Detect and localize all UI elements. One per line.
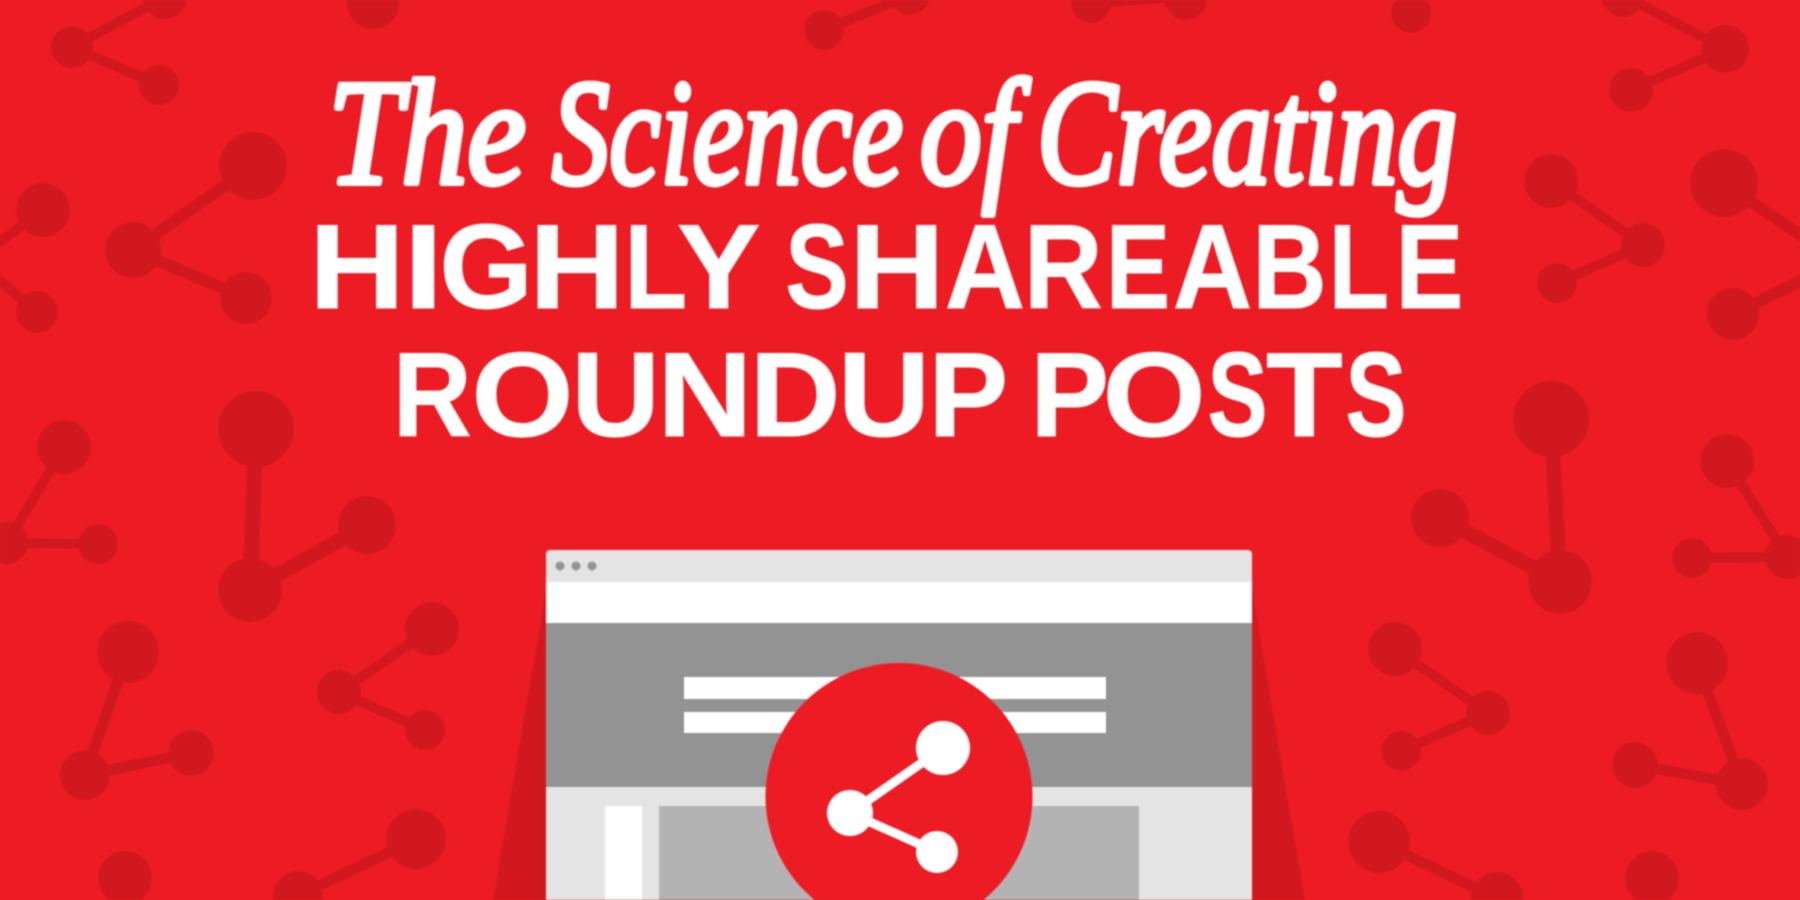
heading line: highly shareable: H [309, 200, 405, 334]
browser title bar [546, 550, 1252, 582]
heading line: highly shareable: S [786, 200, 848, 334]
heading line: roundup posts: N [657, 328, 752, 462]
hero banner [546, 623, 1252, 787]
heading line: highly shareable: B [1252, 200, 1326, 334]
script heading line: of [920, 50, 1030, 216]
heading line: highly shareable: R [1024, 200, 1102, 334]
window control dots [556, 562, 596, 570]
sidebar [605, 806, 642, 900]
share badge [766, 663, 1032, 900]
content block [659, 806, 1139, 900]
page body [546, 787, 1252, 900]
heading line: highly shareable: A [1173, 200, 1252, 334]
browser shadow [493, 590, 1305, 900]
heading line: highly shareable: L [624, 200, 687, 334]
heading line: highly shareable: Y [677, 200, 759, 334]
heading line: roundup posts: P [1030, 328, 1109, 462]
heading line: roundup posts: P [928, 328, 1006, 462]
heading line: highly shareable: H [529, 200, 625, 334]
red circle [766, 663, 1032, 900]
navigation bar [546, 582, 1252, 623]
heading line: roundup posts: O [472, 328, 574, 462]
heading line: roundup posts: S [1208, 328, 1267, 462]
heading line: highly shareable: E [1106, 200, 1170, 334]
heading line: roundup posts: T [1266, 328, 1343, 462]
title [309, 50, 1463, 462]
script heading line: Creating [1037, 50, 1457, 216]
heading line: highly shareable: A [945, 200, 1025, 334]
script heading line: The [328, 50, 526, 216]
heading line: highly shareable: G [440, 200, 533, 334]
script heading line: Science [552, 50, 903, 216]
icon: share [827, 721, 970, 873]
heading line: highly shareable: H [849, 200, 945, 334]
browser window illustration [493, 550, 1305, 900]
heading line: roundup posts: O [1102, 328, 1206, 462]
heading line: roundup posts: S [1346, 328, 1406, 462]
heading line: highly shareable: I [404, 200, 443, 334]
heading line: highly shareable: L [1329, 200, 1389, 334]
heading line: roundup posts: R [393, 328, 472, 462]
heading line: roundup posts: D [750, 328, 840, 462]
heading line: roundup posts: U [838, 328, 930, 462]
heading line: roundup posts: U [572, 328, 660, 462]
hero text lines [684, 677, 1106, 733]
heading line: highly shareable: E [1396, 200, 1463, 334]
